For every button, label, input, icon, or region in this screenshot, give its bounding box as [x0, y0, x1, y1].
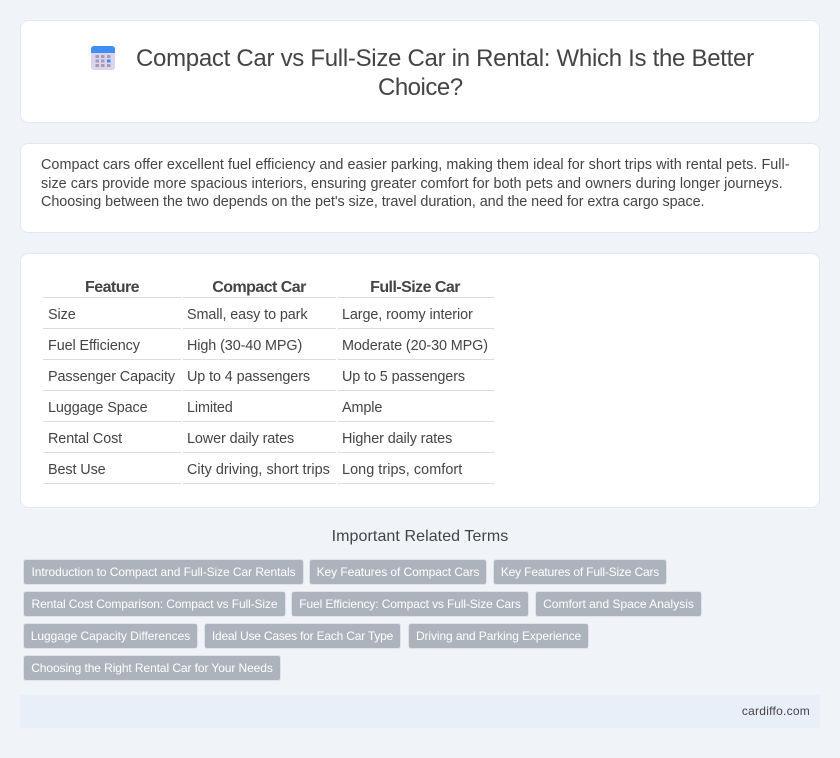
tag: Key Features of Compact Cars	[317, 565, 479, 579]
row: size	[48, 307, 473, 323]
text block: introduction: size cars provide more spacious interiors, ensuring greater comfort for both pets and owners during longer journeys.	[41, 176, 783, 192]
row: passenger capacity	[48, 369, 465, 385]
row: fuel efficiency: Moderate (20-30 MPG)	[342, 338, 488, 354]
panel: comparison table	[20, 253, 820, 508]
tag	[291, 591, 529, 617]
table header: Feature	[85, 279, 139, 296]
row: fuel efficiency: High (30-40 MPG)	[187, 338, 302, 354]
row: passenger capacity: Passenger Capacity	[48, 369, 175, 385]
tag list	[23, 559, 702, 681]
row: luggage space: Limited	[187, 400, 233, 416]
tag: Rental Cost Comparison: Compact vs Full-Size	[32, 597, 277, 611]
icon: calendar	[91, 46, 115, 70]
tag	[493, 559, 667, 585]
row: fuel efficiency	[48, 338, 488, 354]
title second line: Choice?	[378, 74, 463, 101]
heading: related terms: Important Related Terms	[332, 528, 508, 545]
text block: introduction: Compact cars offer excellent fuel efficiency and easier parking, making them ideal for short trips with rental pets. Full-	[41, 157, 790, 173]
panel: introduction	[20, 143, 820, 233]
tag: Ideal Use Cases for Each Car Type	[212, 629, 393, 643]
footer source: cardiffo.com	[742, 704, 810, 718]
tag	[23, 559, 304, 585]
tag	[23, 623, 198, 649]
text block: introduction	[41, 157, 790, 210]
text block: introduction: Choosing between the two depends on the pet's size, travel duration, and the need for extra cargo space.	[41, 194, 704, 210]
tag: Choosing the Right Rental Car for Your Needs	[31, 661, 273, 675]
row: rental cost: Rental Cost	[48, 431, 122, 447]
row: luggage space: Luggage Space	[48, 400, 148, 416]
table header: Compact Car	[212, 279, 306, 296]
table header	[85, 279, 460, 296]
row: best use: Best Use	[48, 462, 106, 478]
tag	[309, 559, 487, 585]
footer	[20, 695, 820, 728]
tag: Luggage Capacity Differences	[31, 629, 190, 643]
row: passenger capacity: Up to 5 passengers	[342, 369, 465, 385]
tag: Driving and Parking Experience	[416, 629, 581, 643]
row: rental cost: Higher daily rates	[342, 431, 452, 447]
title: Compact Car vs Full-Size Car in Rental: Which Is the Better	[136, 45, 754, 72]
tag: Introduction to Compact and Full-Size Car Rentals	[31, 565, 296, 579]
tag: Comfort and Space Analysis	[543, 597, 694, 611]
tag	[535, 591, 702, 617]
row: best use: Long trips, comfort	[342, 462, 462, 478]
tag: Fuel Efficiency: Compact vs Full-Size Cars	[299, 597, 521, 611]
tag	[408, 623, 589, 649]
table header: Full-Size Car	[370, 279, 460, 296]
row: fuel efficiency: Fuel Efficiency	[48, 338, 140, 354]
row: best use: City driving, short trips	[187, 462, 330, 478]
row: luggage space	[48, 400, 382, 416]
panel: header	[20, 20, 820, 123]
row: rental cost: Lower daily rates	[187, 431, 294, 447]
row: passenger capacity: Up to 4 passengers	[187, 369, 310, 385]
tag: Key Features of Full-Size Cars	[501, 565, 659, 579]
tag	[23, 591, 286, 617]
tag	[23, 655, 281, 681]
row: size: Small, easy to park	[187, 307, 307, 323]
row: size: Size	[48, 307, 76, 323]
tag	[204, 623, 401, 649]
row: best use	[48, 462, 462, 478]
row: size: Large, roomy interior	[342, 307, 473, 323]
row: luggage space: Ample	[342, 400, 382, 416]
row: rental cost	[48, 431, 452, 447]
